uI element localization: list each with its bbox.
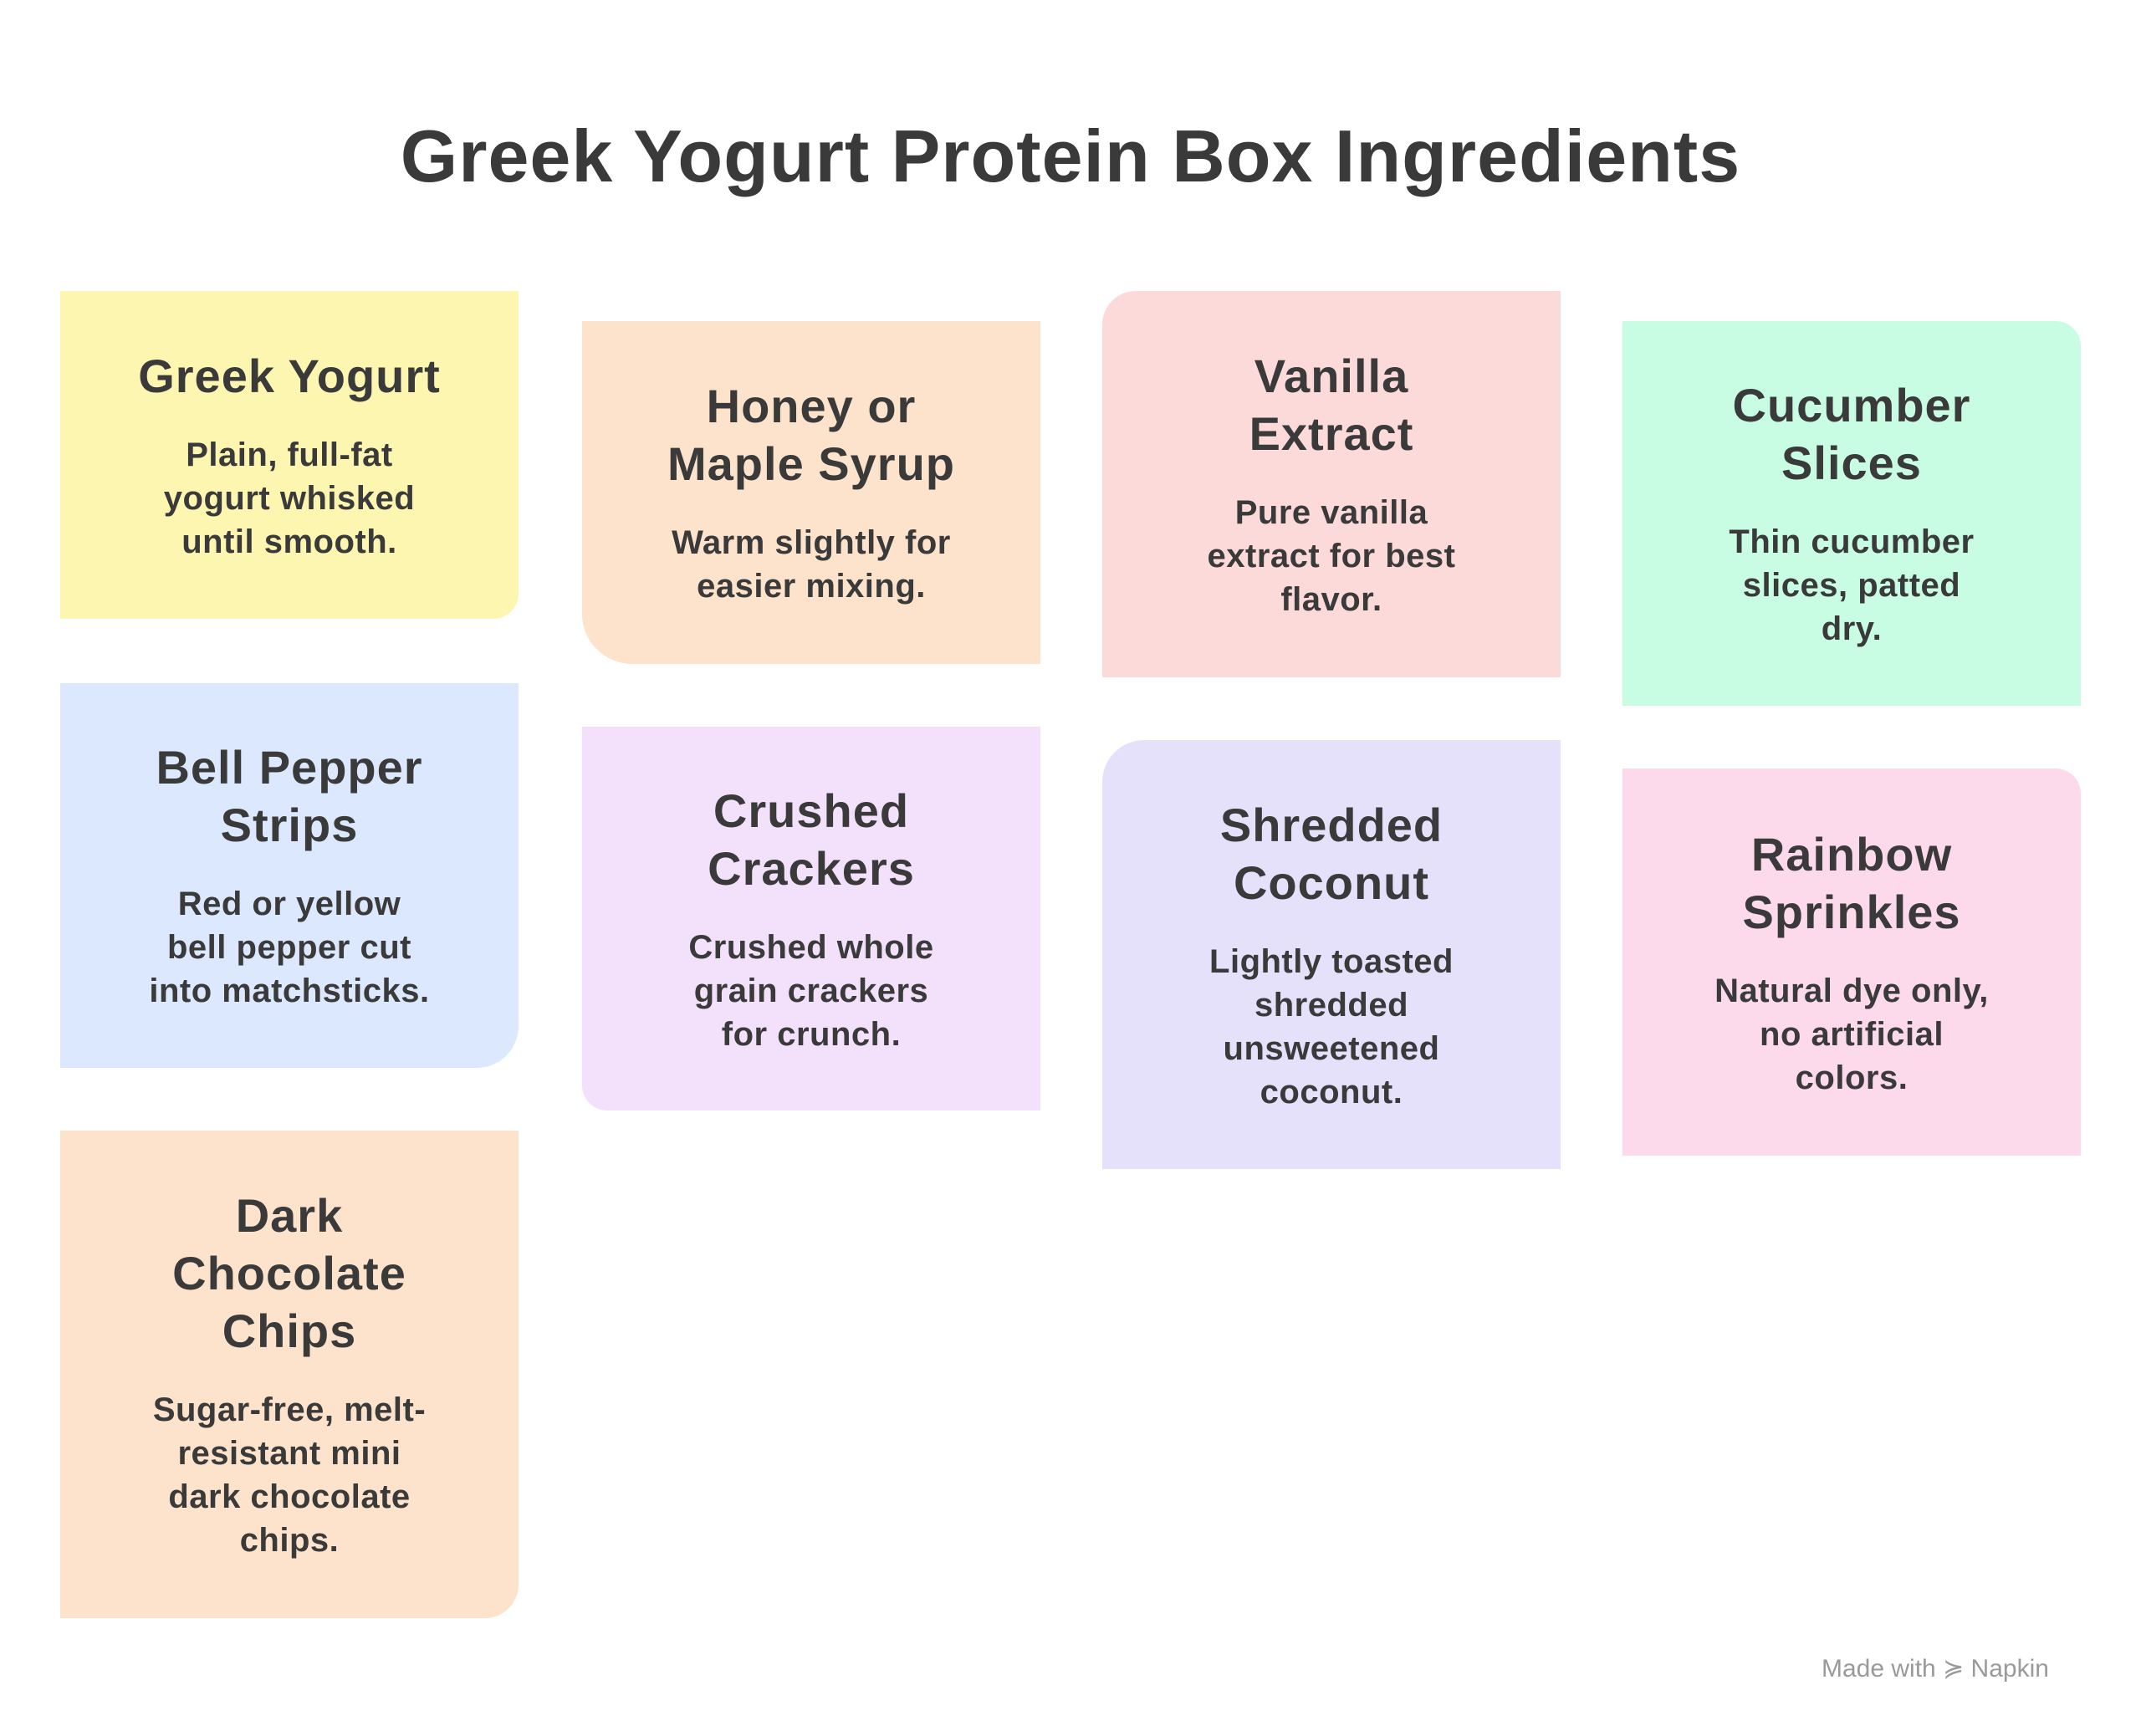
text: crackers: grain crackers	[694, 972, 928, 1008]
card: honey	[582, 321, 1040, 664]
text: coconut: coconut.	[1260, 1074, 1403, 1111]
heading: bell pepper	[156, 741, 423, 851]
text: bell pepper: into matchsticks.	[149, 973, 430, 1009]
text: coconut: unsweetened	[1224, 1030, 1439, 1067]
heading: chocolate: Dark	[236, 1189, 343, 1242]
heading: bell pepper: Bell Pepper	[156, 741, 423, 794]
text: coconut: shredded	[1254, 987, 1408, 1024]
text: chocolate	[153, 1391, 426, 1559]
heading: sprinkles	[1742, 828, 1961, 938]
card: chocolate	[60, 1131, 519, 1618]
heading: bell pepper: Strips	[221, 799, 358, 851]
card: greek yogurt	[60, 291, 519, 619]
heading: crackers: Crushed	[713, 784, 909, 836]
text: greek yogurt	[164, 437, 415, 560]
heading: vanilla: Extract	[1249, 407, 1413, 460]
heading: crackers	[708, 784, 915, 895]
text: cucumber: dry.	[1822, 610, 1882, 647]
text: vanilla: extract for best	[1208, 538, 1455, 574]
text: chocolate: chips.	[240, 1522, 339, 1559]
card: crackers	[582, 727, 1040, 1111]
text: greek yogurt: yogurt whisked	[164, 480, 415, 517]
text: vanilla	[1208, 494, 1455, 618]
heading: crackers: Crackers	[708, 841, 915, 895]
heading: chocolate: Chips	[222, 1305, 356, 1357]
text: crackers: for crunch.	[722, 1015, 901, 1052]
heading: greek yogurt: Greek Yogurt	[138, 350, 441, 401]
text: sprinkles: Natural dye only,	[1714, 972, 1989, 1008]
text: crackers	[688, 928, 934, 1052]
text: coconut	[1209, 943, 1454, 1111]
card: coconut	[1102, 740, 1561, 1169]
card: vanilla	[1102, 291, 1561, 677]
text: chocolate: resistant mini	[177, 1435, 401, 1472]
heading: coconut: Shredded	[1220, 798, 1443, 851]
text: crackers: Crushed whole	[688, 928, 934, 965]
heading: coconut	[1220, 798, 1443, 908]
text: cucumber: Thin cucumber	[1729, 523, 1975, 560]
footer: made with napkin: Made with ≽ Napkin	[1822, 1655, 2049, 1682]
text: greek yogurt: Plain, full-fat	[186, 437, 393, 473]
heading: honey: Maple Syrup	[667, 437, 955, 490]
text: bell pepper: bell pepper cut	[167, 929, 411, 966]
text: chocolate: Sugar-free, melt-	[153, 1391, 426, 1428]
heading: honey: Honey or	[707, 380, 916, 432]
heading: chocolate: Chocolate	[172, 1247, 406, 1299]
heading: cucumber: Cucumber	[1733, 379, 1970, 431]
text: sprinkles: colors.	[1796, 1059, 1908, 1095]
text: sprinkles: no artificial	[1760, 1015, 1944, 1052]
card: sprinkles	[1622, 768, 2081, 1156]
heading: cucumber	[1733, 379, 1970, 489]
text: coconut: Lightly toasted	[1209, 943, 1454, 980]
heading: vanilla: Vanilla	[1254, 350, 1408, 402]
text: honey: easier mixing.	[697, 568, 926, 605]
text: honey: Warm slightly for	[672, 524, 951, 561]
text: cucumber: slices, patted	[1743, 567, 1960, 604]
heading: sprinkles: Sprinkles	[1742, 885, 1961, 938]
text: bell pepper: Red or yellow	[178, 886, 401, 922]
heading: sprinkles: Rainbow	[1751, 828, 1952, 880]
heading: vanilla	[1249, 350, 1413, 460]
card: cucumber	[1622, 321, 2081, 706]
title: Greek Yogurt Protein Box Ingredients	[401, 115, 1740, 197]
card: bell pepper	[60, 683, 519, 1068]
heading: cucumber: Slices	[1781, 437, 1922, 489]
text: vanilla: Pure vanilla	[1235, 494, 1428, 531]
text: cucumber	[1729, 523, 1975, 647]
text: bell pepper	[149, 886, 430, 1009]
text: sprinkles	[1714, 972, 1989, 1095]
text: chocolate: dark chocolate	[168, 1478, 411, 1515]
text: greek yogurt: until smooth.	[181, 523, 397, 560]
heading: coconut: Coconut	[1234, 856, 1429, 908]
text: vanilla: flavor.	[1280, 581, 1382, 618]
heading: honey	[667, 380, 955, 490]
text: honey	[672, 524, 951, 605]
heading: chocolate	[172, 1189, 406, 1357]
